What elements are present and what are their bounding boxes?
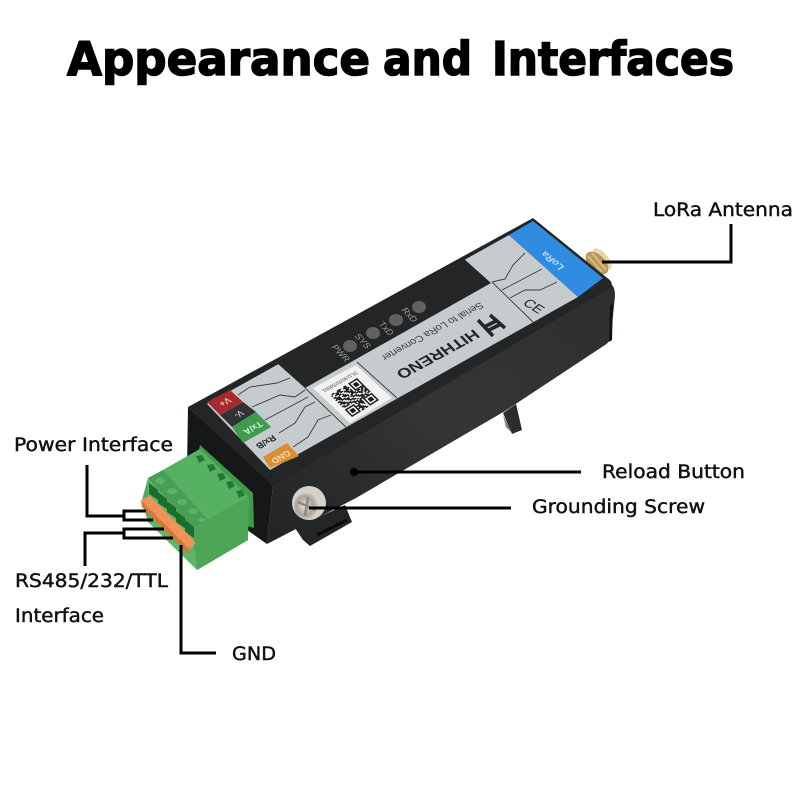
blue LoRa stripe: LoRa [538, 249, 568, 271]
LED indicators: SYS [352, 332, 373, 350]
title: Interfaces [492, 32, 734, 86]
right face [192, 497, 248, 570]
flange [198, 445, 254, 528]
terminal colour tags: Tx/A [241, 420, 265, 437]
callout: RS485/232/TTL Interface: RS485/232/TTL [15, 571, 169, 592]
orange push buttons [141, 496, 196, 549]
front face [148, 478, 197, 570]
callout: GND [181, 545, 276, 665]
light label panel [207, 235, 578, 470]
LED indicators: TxD [376, 320, 397, 337]
LED indicators [329, 301, 426, 364]
LED indicators: RxD [399, 306, 420, 324]
case top face [188, 218, 612, 486]
rear top step [163, 449, 248, 522]
callout: RS485/232/TTL Interface [15, 529, 173, 627]
din clips [295, 404, 522, 546]
wiring lines on label [238, 253, 557, 447]
brand logo: HITHRENO [392, 326, 483, 382]
CE mark: CE [520, 296, 548, 316]
orange button shadows [141, 500, 189, 555]
callout: Power Interface: Power Interface [14, 435, 173, 456]
callout: LoRa Antenna [602, 200, 793, 262]
terminal colour tags: V+ [217, 396, 233, 408]
terminal openings [149, 483, 194, 538]
front top step [148, 470, 210, 528]
callout: GND: GND [232, 644, 276, 665]
title: and [383, 32, 472, 86]
LED indicators: PWR [329, 343, 353, 364]
callout: Power Interface [14, 435, 173, 520]
brand logo [392, 315, 505, 382]
rear openings [196, 455, 245, 498]
callout: LoRa Antenna: LoRa Antenna [653, 200, 793, 221]
silhouette [142, 449, 249, 570]
grounding screw [292, 486, 326, 520]
terminal colour tags: V- [232, 408, 246, 420]
terminal colour tags [207, 390, 299, 468]
callout: Reload Button: Reload Button [602, 462, 745, 483]
product name text: Serial to LoRa Converter [378, 300, 485, 362]
reload button hole [350, 468, 358, 476]
case front face [187, 407, 273, 544]
terminal colour tags: Rx/B [253, 433, 278, 451]
title: Appearance [67, 32, 370, 86]
callout: RS485/232/TTL Interface: Interface [15, 606, 104, 627]
case side face [267, 283, 615, 544]
blue LoRa stripe [509, 221, 603, 297]
title [67, 32, 734, 86]
terminal colour tags: GND [268, 448, 293, 466]
dark LED band [277, 258, 491, 388]
QR sticker: SL119020250001 [320, 370, 359, 393]
green terminal block [141, 445, 254, 570]
side slot [609, 304, 613, 342]
device: converter photo [141, 218, 615, 570]
callout: Grounding Screw: Grounding Screw [532, 497, 705, 518]
antenna connector [581, 245, 615, 279]
QR sticker [313, 365, 392, 423]
